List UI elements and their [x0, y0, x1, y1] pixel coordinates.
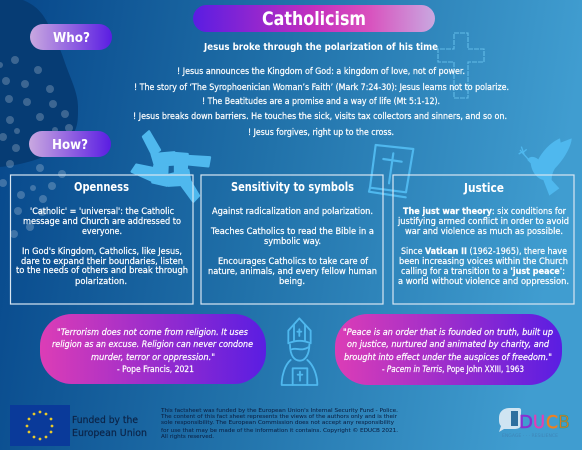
text: sensitivity body: Against radicalization and polarization.	[212, 207, 373, 217]
who text block: ! The Beatitudes are a promise and a way of life (Mt 5:1-12).	[202, 97, 440, 107]
icon: dashed cross	[438, 33, 484, 98]
title pill	[193, 5, 435, 32]
logo: EDUCB: C	[546, 412, 558, 433]
text: openness body: In God's Kingdom, Catholics, like Jesus,	[22, 247, 182, 257]
text: justice body: war and violence as much as possible.	[405, 227, 563, 237]
text: sensitivity body: symbolic way.	[264, 237, 321, 247]
funded by text: Funded by the	[72, 415, 138, 426]
logo: EDUCB: B	[558, 412, 570, 433]
text: sensitivity body: Teaches Catholics to read the Bible in a	[210, 227, 374, 237]
quote: Pacem in Terris: on justice, nurtured and animated by charity, and	[347, 339, 549, 350]
disclaimer: sole responsibility. The European Commission does not accept any responsibility	[161, 420, 394, 426]
text: justice body: justifying armed conflict in order to avoid	[397, 217, 569, 227]
text: justice body: a world without violence and oppression.	[398, 277, 569, 287]
text: openness body	[16, 207, 188, 287]
funded by text	[72, 415, 147, 439]
quote: Pacem in Terris: brought into effect under the auspices of freedom."	[344, 352, 552, 363]
quote: Pope Francis: "Terrorism does not come from religion. It uses	[57, 327, 248, 338]
text: openness body: dare to expand their boundaries, listen	[21, 257, 183, 267]
text: sensitivity body	[208, 207, 377, 287]
disclaimer: The content of this fact sheet represents the views of the authors only and is their	[160, 414, 398, 420]
quote: Pacem in Terris: - Pacem in Terris, Pope John XXIII, 1963	[382, 365, 524, 375]
heading: justice: Justice	[463, 181, 504, 195]
icon: broken cross	[132, 131, 210, 202]
text: justice body: calling for a transition to a 'just peace':	[401, 267, 565, 277]
heading: sensitivity to symbols: Sensitivity to symbols	[231, 180, 354, 194]
icon: bible	[369, 145, 413, 197]
label: how: How?	[52, 137, 88, 153]
text: justice body	[397, 207, 569, 287]
title pill: Catholicism	[262, 8, 366, 30]
who text block: ! Jesus breaks down barriers. He touches the sick, visits tax collectors and sinners, and so on.	[133, 112, 507, 122]
logo: EDUCB	[499, 408, 570, 438]
text: sensitivity body: being.	[279, 277, 305, 287]
who text block: ! Jesus announces the Kingdom of God: a kingdom of love, not of power.	[177, 67, 465, 77]
logo: EDUCB: U	[533, 412, 545, 433]
text: justice body: been increasing voices within the Church	[399, 257, 568, 267]
funded by text: European Union	[72, 428, 147, 439]
decorative dark blob with dots	[0, 0, 78, 238]
text: justice body: Since Vatican II (1962-1965), there have	[401, 247, 567, 257]
text: openness body: polarization.	[75, 277, 127, 287]
text: openness body: to the needs of others and break through	[16, 266, 188, 276]
subtitle: Jesus broke through the polarization of his time	[203, 42, 438, 53]
text: openness body: message and Church are addressed to	[23, 217, 181, 227]
who text block: ! Jesus forgives, right up to the cross.	[248, 128, 394, 138]
EU flag	[10, 405, 70, 446]
disclaimer: for use that may be made of the information it contains. Copyright © EDUCB 2021.	[161, 427, 398, 434]
text: openness body: 'Catholic' = 'universal': the Catholic	[30, 207, 174, 217]
label: how	[29, 131, 111, 157]
panel: sensitivity to symbols	[201, 175, 383, 304]
icon: dove	[519, 138, 572, 196]
quote: Pope Francis	[40, 314, 266, 384]
who text block	[133, 67, 509, 138]
quote: Pacem in Terris	[335, 314, 562, 385]
text: sensitivity body: Encourages Catholics to take care of	[218, 257, 369, 267]
text: openness body: everyone.	[82, 227, 122, 237]
quote: Pacem in Terris: "Peace is an order that is founded on truth, built up	[343, 327, 553, 338]
text: sensitivity body: nature, animals, and every fellow human	[208, 267, 377, 277]
disclaimer: This factsheet was funded by the European Union's Internal Security Fund - Police.	[160, 408, 398, 414]
quote: Pope Francis: - Pope Francis, 2021	[117, 365, 194, 375]
disclaimer	[160, 408, 398, 440]
quote: Pope Francis: murder, terror or oppression."	[91, 352, 215, 363]
heading: openness: Openness	[74, 180, 129, 194]
logo: EDUCB: ENGAGE · · · RESILIENCE	[502, 433, 559, 438]
label: who: Who?	[53, 30, 90, 46]
disclaimer: All rights reserved.	[161, 434, 214, 440]
icon: bishop	[282, 318, 317, 385]
who text block: ! The story of ‘The Syrophoenician Woman’s Faith’ (Mark 7:24-30): Jesus learns not to polarize.	[134, 83, 509, 93]
label: who	[30, 24, 112, 50]
logo: EDUCB: D	[519, 412, 533, 433]
text: justice body: The just war theory: six conditions for	[403, 207, 566, 217]
quote: Pope Francis: religion as an excuse. Religion can never condone	[52, 339, 253, 350]
panel: openness	[10, 175, 193, 304]
panel: justice	[393, 175, 574, 304]
